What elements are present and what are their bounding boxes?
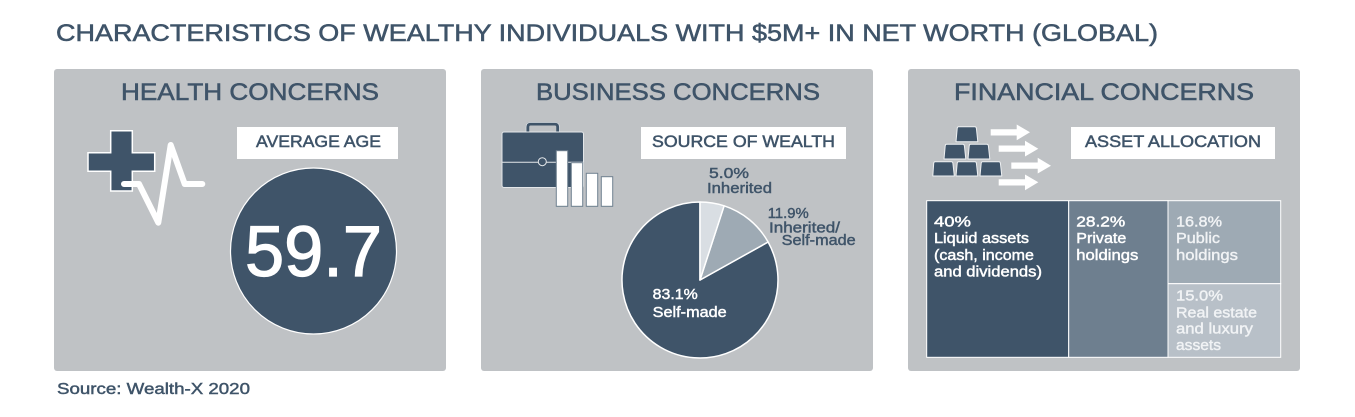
treemap cell: real estate and luxury assets bbox=[1168, 284, 1281, 357]
treemap cell: liquid assets bbox=[927, 201, 1069, 357]
label: average age: AVERAGE AGE bbox=[256, 133, 381, 151]
treemap cell: liquid assets: (cash, income bbox=[934, 247, 1034, 264]
treemap cell: real estate and luxury assets: and luxury bbox=[1176, 321, 1254, 338]
panel: financial concerns bbox=[908, 69, 1300, 371]
heading: health concerns: HEALTH CONCERNS bbox=[121, 79, 379, 106]
treemap cell: public holdings: Public bbox=[1176, 230, 1221, 247]
pie label: inherited / self-made: 11.9% bbox=[768, 205, 809, 222]
stat circle: 59.7: 59.7 bbox=[245, 213, 382, 292]
panel: business concerns bbox=[481, 69, 873, 371]
treemap cell: real estate and luxury assets: 15.0% bbox=[1176, 288, 1223, 305]
title: CHARACTERISTICS OF WEALTHY INDIVIDUALS WITH $5M+ IN NET WORTH (GLOBAL) bbox=[56, 20, 1158, 47]
treemap cell: private holdings: Private bbox=[1076, 230, 1126, 247]
pie label: inherited: 5.0% bbox=[709, 165, 749, 182]
pie label: inherited / self-made bbox=[768, 205, 856, 249]
treemap cell: liquid assets: 40% bbox=[934, 214, 971, 231]
pie label: inherited: Inherited bbox=[707, 180, 772, 197]
treemap cell: public holdings: holdings bbox=[1176, 247, 1238, 264]
pie label: inherited bbox=[707, 165, 772, 197]
icon: gold bars with arrows bbox=[933, 124, 1051, 190]
treemap cell: public holdings: 16.8% bbox=[1176, 214, 1222, 231]
treemap cell: private holdings: 28.2% bbox=[1076, 214, 1125, 231]
treemap cell: private holdings bbox=[1069, 201, 1168, 357]
source note: Source: Wealth-X 2020 bbox=[57, 381, 250, 398]
label: average age bbox=[237, 127, 398, 159]
stat circle: 59.7 bbox=[230, 168, 396, 334]
treemap cell: real estate and luxury assets: assets bbox=[1176, 337, 1221, 354]
treemap: asset allocation bbox=[927, 201, 1281, 357]
treemap cell: public holdings bbox=[1168, 201, 1281, 284]
pie label: self-made: Self-made bbox=[653, 304, 727, 321]
label: asset allocation bbox=[1071, 127, 1275, 159]
icon: medical cross with pulse bbox=[88, 131, 202, 223]
pie label: inherited / self-made: Inherited/ bbox=[769, 220, 841, 237]
heading: financial concerns: FINANCIAL CONCERNS bbox=[954, 79, 1254, 106]
pie label: inherited / self-made: Self-made bbox=[782, 232, 856, 249]
treemap cell: liquid assets: and dividends) bbox=[934, 264, 1042, 281]
pie label: self-made: 83.1% bbox=[653, 286, 698, 303]
icon: briefcase with bars bbox=[502, 122, 613, 206]
pie label: self-made bbox=[653, 286, 727, 321]
treemap cell: liquid assets: Liquid assets bbox=[934, 230, 1029, 247]
treemap cell: private holdings: holdings bbox=[1076, 247, 1138, 264]
label: source of wealth: SOURCE OF WEALTH bbox=[652, 133, 835, 151]
pie chart: source of wealth bbox=[622, 202, 778, 358]
label: source of wealth bbox=[641, 127, 846, 159]
heading: business concerns: BUSINESS CONCERNS bbox=[536, 79, 820, 106]
label: asset allocation: ASSET ALLOCATION bbox=[1085, 133, 1261, 151]
treemap cell: real estate and luxury assets: Real estate bbox=[1176, 305, 1257, 322]
panel: health concerns bbox=[54, 69, 446, 371]
